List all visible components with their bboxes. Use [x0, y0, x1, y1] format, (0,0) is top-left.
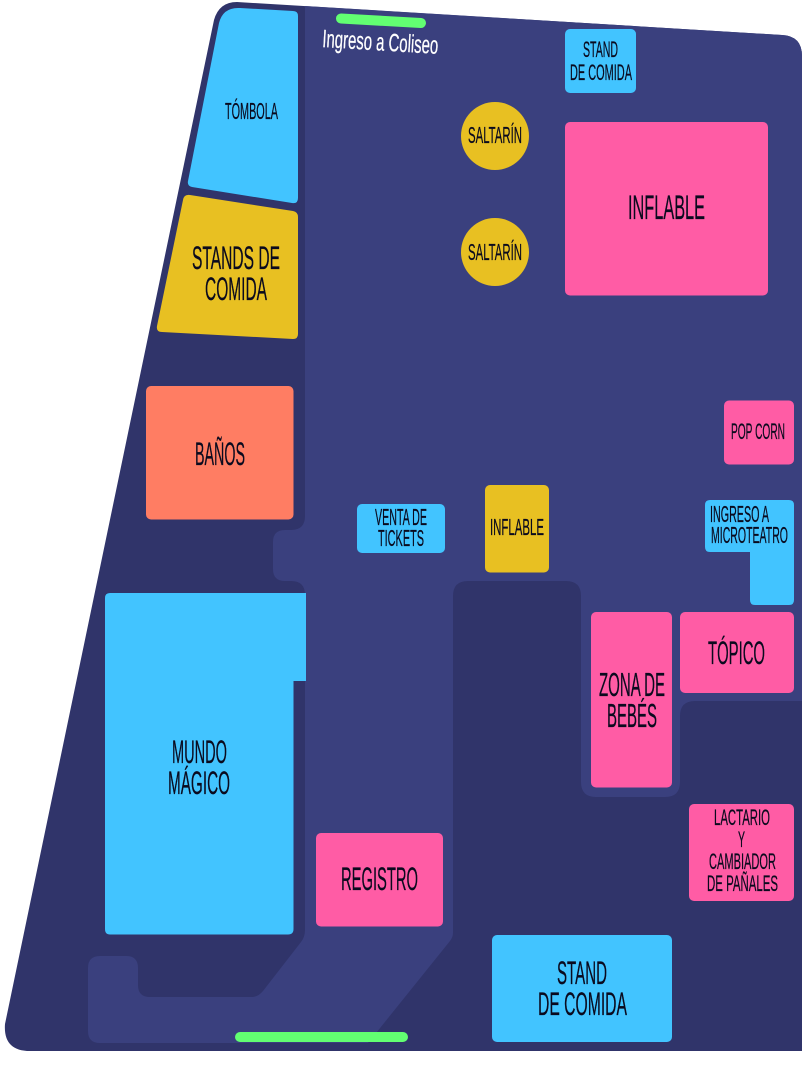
zone: tombola: TÓMBOLA [225, 98, 278, 124]
zone: food stand top: DE COMIDA [570, 60, 632, 85]
zone: restrooms [146, 386, 294, 520]
zone: large inflatable: INFLABLE [628, 189, 705, 227]
entrance label: Ingreso a Coliseo [322, 25, 439, 60]
zone: food stand bottom: DE COMIDA [538, 986, 627, 1022]
zone: bounce house one: SALTARÍN [468, 122, 522, 148]
zone: ticket sales: TICKETS [378, 525, 424, 551]
zone: mundo magico [105, 593, 306, 934]
zone: ticket sales [357, 504, 445, 553]
zone: registration: REGISTRO [341, 861, 418, 897]
zone: baby area: BEBÉS [607, 697, 657, 734]
zone: bounce house two: SALTARÍN [468, 239, 522, 265]
zone: popcorn [724, 400, 794, 464]
zone: microtheatre entrance [705, 500, 794, 605]
zone: food stands left [157, 195, 298, 339]
top entrance bar [341, 18, 421, 23]
zone: restrooms: BAÑOS [195, 436, 245, 472]
zone: ticket sales: VENTA DE [375, 504, 427, 530]
zone: mundo magico: MUNDO [172, 734, 227, 770]
zone: large inflatable [565, 122, 768, 296]
bottom entrance bar [235, 1032, 408, 1042]
zone: registration [316, 833, 443, 926]
zone: food stands left: COMIDA [205, 271, 267, 307]
zone: food stand top [565, 29, 636, 93]
zone: baby area [591, 612, 672, 788]
zone: tombola [188, 8, 298, 203]
zone: food stand top: STAND [583, 37, 618, 62]
zone: food stand bottom: STAND [557, 955, 607, 991]
zone: small inflatable [485, 485, 549, 572]
zone: baby area: ZONA DE [599, 666, 665, 703]
zone: food stands left: STANDS DE [192, 240, 280, 276]
zone: nursing room [689, 804, 794, 901]
zone: mundo magico: MÁGICO [168, 765, 230, 801]
zone: first aid [680, 612, 794, 693]
zone: food stand bottom [492, 935, 672, 1042]
zone: small inflatable: INFLABLE [490, 514, 544, 540]
zone: bounce house two [461, 218, 529, 286]
zone: bounce house one [461, 102, 529, 170]
zone: nursing room: Y [738, 827, 745, 852]
